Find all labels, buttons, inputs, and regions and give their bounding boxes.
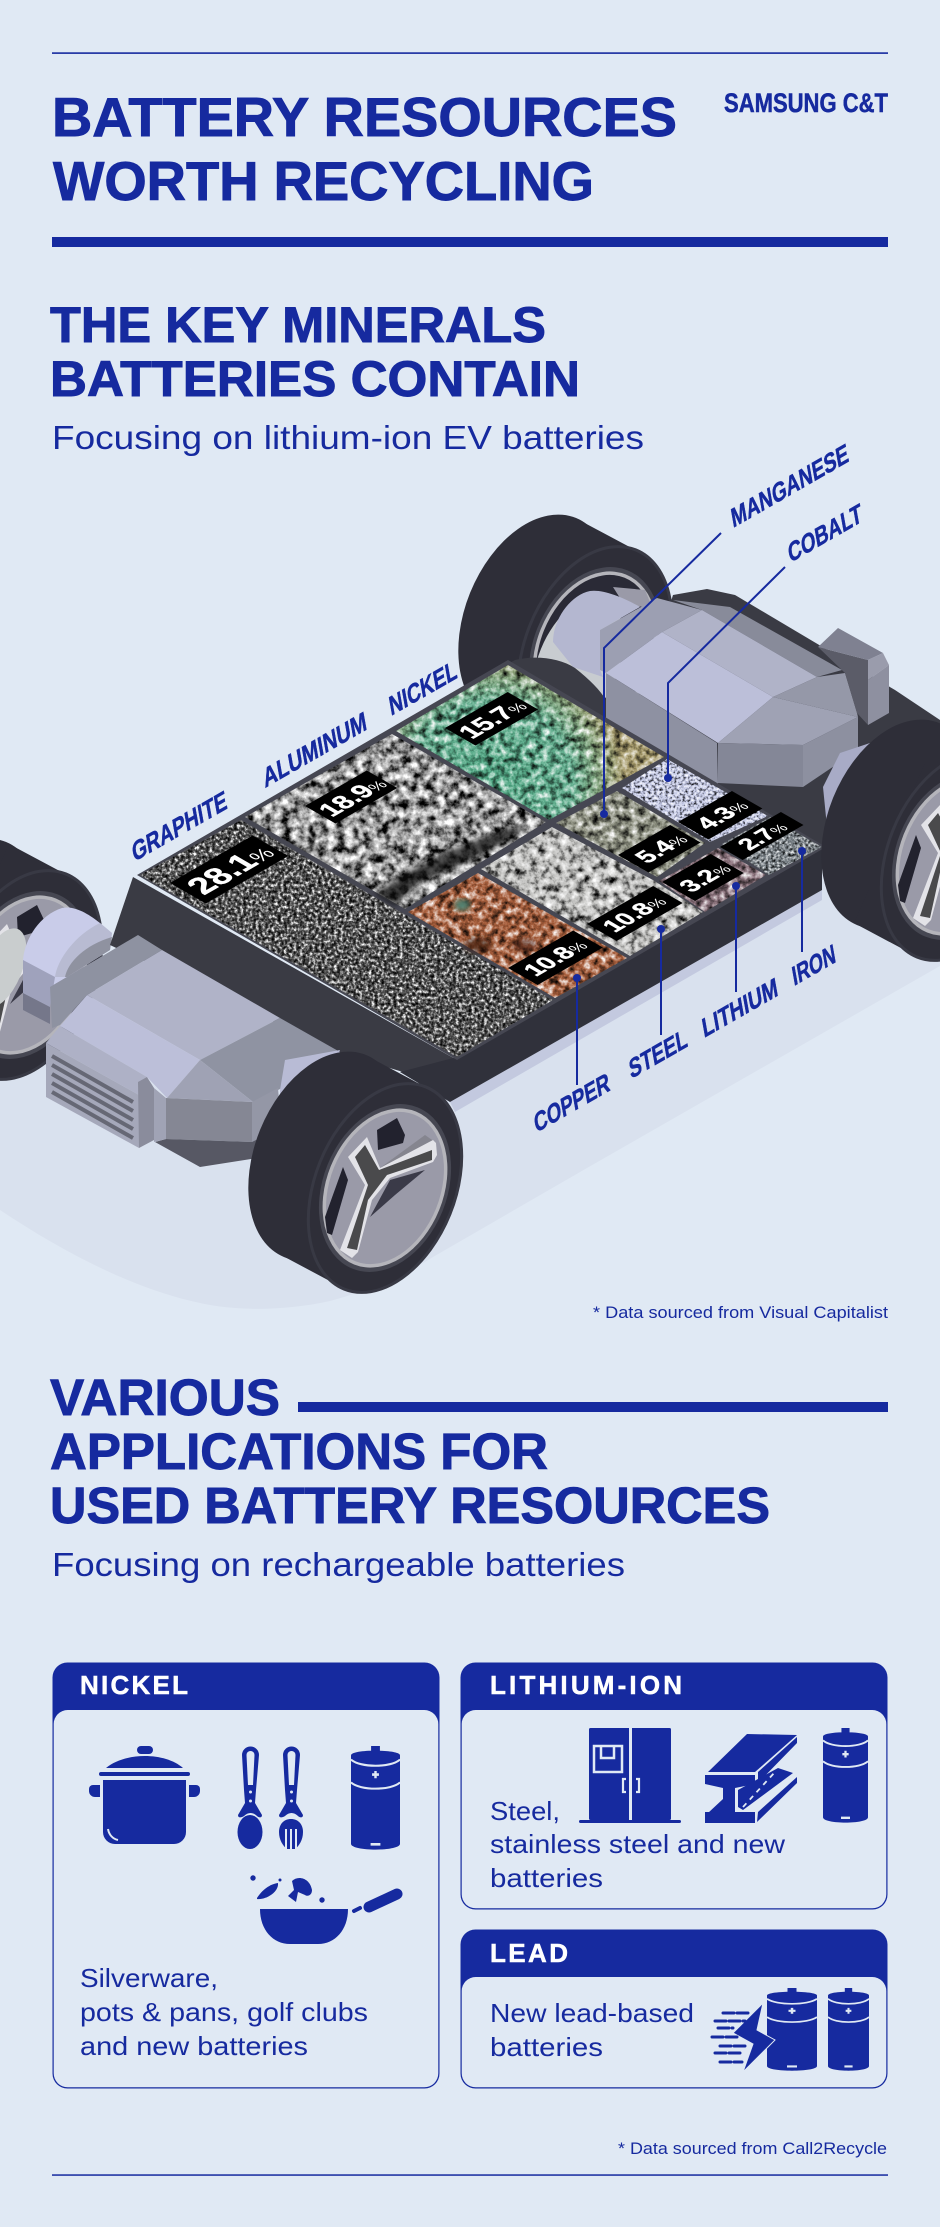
panel: nickel [52, 1662, 440, 2088]
heading: key minerals [50, 297, 580, 407]
title: WORTH RECYCLING [53, 150, 594, 212]
wheel: far left [0, 816, 131, 1102]
mineral labels: GRAPHITE [130, 784, 229, 868]
panel text: batteries [490, 2032, 603, 2062]
icon: wok [250, 1875, 397, 1944]
mineral: aluminum [245, 734, 546, 909]
car illustration [0, 437, 940, 1315]
badge: graphite 28.1% [170, 836, 288, 904]
percentage badges [170, 692, 804, 985]
mineral labels [130, 437, 864, 1139]
icon: pot [89, 1746, 200, 1844]
mineral: copper [408, 873, 627, 998]
chassis: rear fender [392, 658, 667, 822]
wheel: near front [219, 1029, 491, 1315]
badge: copper 10.8%: 10.8% [518, 936, 594, 980]
mineral labels: COBALT [786, 497, 864, 569]
mineral labels: NICKEL [387, 654, 459, 722]
leader: iron [798, 847, 806, 952]
footer rule [52, 2174, 888, 2176]
icon: spoon [238, 1747, 262, 1849]
icon: batteries [767, 1988, 869, 2071]
badge: aluminum 18.9% [305, 770, 397, 824]
axle: near rear [823, 743, 883, 827]
mineral labels: ALUMINUM [261, 705, 369, 794]
rear hood [600, 598, 889, 787]
heading: applications: USED BATTERY RESOURCES [50, 1477, 770, 1534]
leader: manganese [600, 533, 721, 818]
axle: far rear [553, 591, 640, 677]
plate base [137, 660, 826, 1060]
header top rule [52, 52, 888, 54]
source note: Call2Recycle: * Data sourced from Call2Recycle [618, 2139, 887, 2158]
chassis contact shadow [450, 890, 822, 1112]
chassis: rear section [640, 589, 940, 850]
mineral: lithium [659, 848, 766, 912]
panel text: and new batteries [80, 2031, 308, 2061]
badge: manganese 5.4%: 5.4% [629, 830, 694, 867]
axle: far left [23, 907, 112, 1024]
header thick rule [52, 237, 888, 247]
badge: nickel 15.7%: 15.7% [451, 695, 534, 742]
panel text: pots & pans, golf clubs [80, 1997, 368, 2027]
title [52, 86, 677, 212]
badge: manganese 5.4% [618, 825, 701, 872]
icon: battery [823, 1728, 868, 1823]
mineral: manganese [556, 791, 705, 877]
panel heading: LITHIUM-ION [490, 1670, 682, 1700]
heading rule [298, 1402, 888, 1412]
icon: steel beam [705, 1734, 797, 1823]
chassis: front wall [110, 877, 457, 1072]
leader: steel [657, 925, 665, 1035]
badge: lithium 3.2%: 3.2% [673, 859, 737, 896]
heading: applications: VARIOUS [50, 1369, 280, 1426]
icon: fork [279, 1747, 303, 1850]
badge: cobalt 4.3%: 4.3% [690, 796, 755, 833]
heading: key minerals: THE KEY MINERALS [50, 297, 546, 353]
leader: lithium [732, 882, 740, 992]
mineral plate [137, 660, 826, 1060]
badge: iron 2.7% [720, 812, 804, 860]
panel text [490, 1796, 785, 1893]
source note: Visual Capitalist: * Data sourced from Visual Capitalist [593, 1303, 888, 1322]
ground shadow [0, 800, 940, 1309]
heading: applications [50, 1369, 770, 1534]
mineral: graphite [140, 820, 553, 1057]
badge: steel 10.8%: 10.8% [597, 892, 673, 936]
axle: near front [280, 1050, 340, 1115]
mineral labels: STEEL [627, 1022, 689, 1085]
logo: Samsung C&amp;T: SAMSUNG C&T [724, 88, 888, 118]
subheading: rechargeable: Focusing on rechargeable batteries [52, 1546, 625, 1583]
heading: applications: APPLICATIONS FOR [50, 1423, 548, 1480]
panel: lead [460, 1930, 888, 2088]
heading: key minerals: BATTERIES CONTAIN [50, 351, 580, 407]
badge: lithium 3.2% [662, 854, 744, 901]
leader: copper [573, 974, 581, 1085]
mineral labels: LITHIUM [700, 971, 780, 1044]
badge: cobalt 4.3% [678, 791, 762, 840]
badge: iron 2.7%: 2.7% [731, 818, 793, 853]
panel text: Silverware, [80, 1963, 218, 1993]
wheel: near rear [792, 697, 940, 983]
panel: lithium-ion [460, 1662, 888, 1910]
badge: nickel 15.7% [445, 692, 538, 746]
chassis: side wall [400, 847, 822, 1102]
rear block [818, 628, 889, 725]
icon: charging bolt [712, 2003, 775, 2072]
mineral labels: COPPER [532, 1066, 612, 1139]
panel text: batteries [490, 1863, 603, 1893]
panel text: New lead-based [490, 1998, 694, 2028]
badge: copper 10.8% [508, 930, 603, 985]
mineral: nickel [396, 665, 664, 820]
badge: graphite 28.1%: 28.1% [179, 840, 283, 899]
mineral labels: MANGANESE [729, 437, 851, 534]
mineral: cobalt [622, 759, 768, 842]
panel text [490, 1998, 694, 2062]
leader: cobalt [664, 567, 785, 782]
subheading: lithium-ion: Focusing on lithium-ion EV batteries [52, 419, 644, 456]
panel heading: LEAD [490, 1938, 568, 1968]
panel heading: NICKEL [80, 1670, 188, 1700]
panel text: stainless steel and new [490, 1829, 785, 1859]
badge: aluminum 18.9%: 18.9% [311, 773, 394, 820]
icon: fridge [579, 1728, 681, 1823]
wheel: far rear [429, 492, 701, 778]
panel text [80, 1963, 368, 2061]
leader lines [573, 533, 806, 1085]
title: BATTERY RESOURCES [52, 86, 677, 148]
grille [46, 1026, 154, 1148]
icon: battery [351, 1746, 400, 1850]
badge: steel 10.8% [587, 886, 683, 941]
mineral: steel [481, 827, 703, 956]
front hood [46, 935, 340, 1167]
mineral labels: IRON [790, 938, 838, 992]
panel text: Steel, [490, 1796, 560, 1826]
mineral: iron [722, 817, 822, 875]
